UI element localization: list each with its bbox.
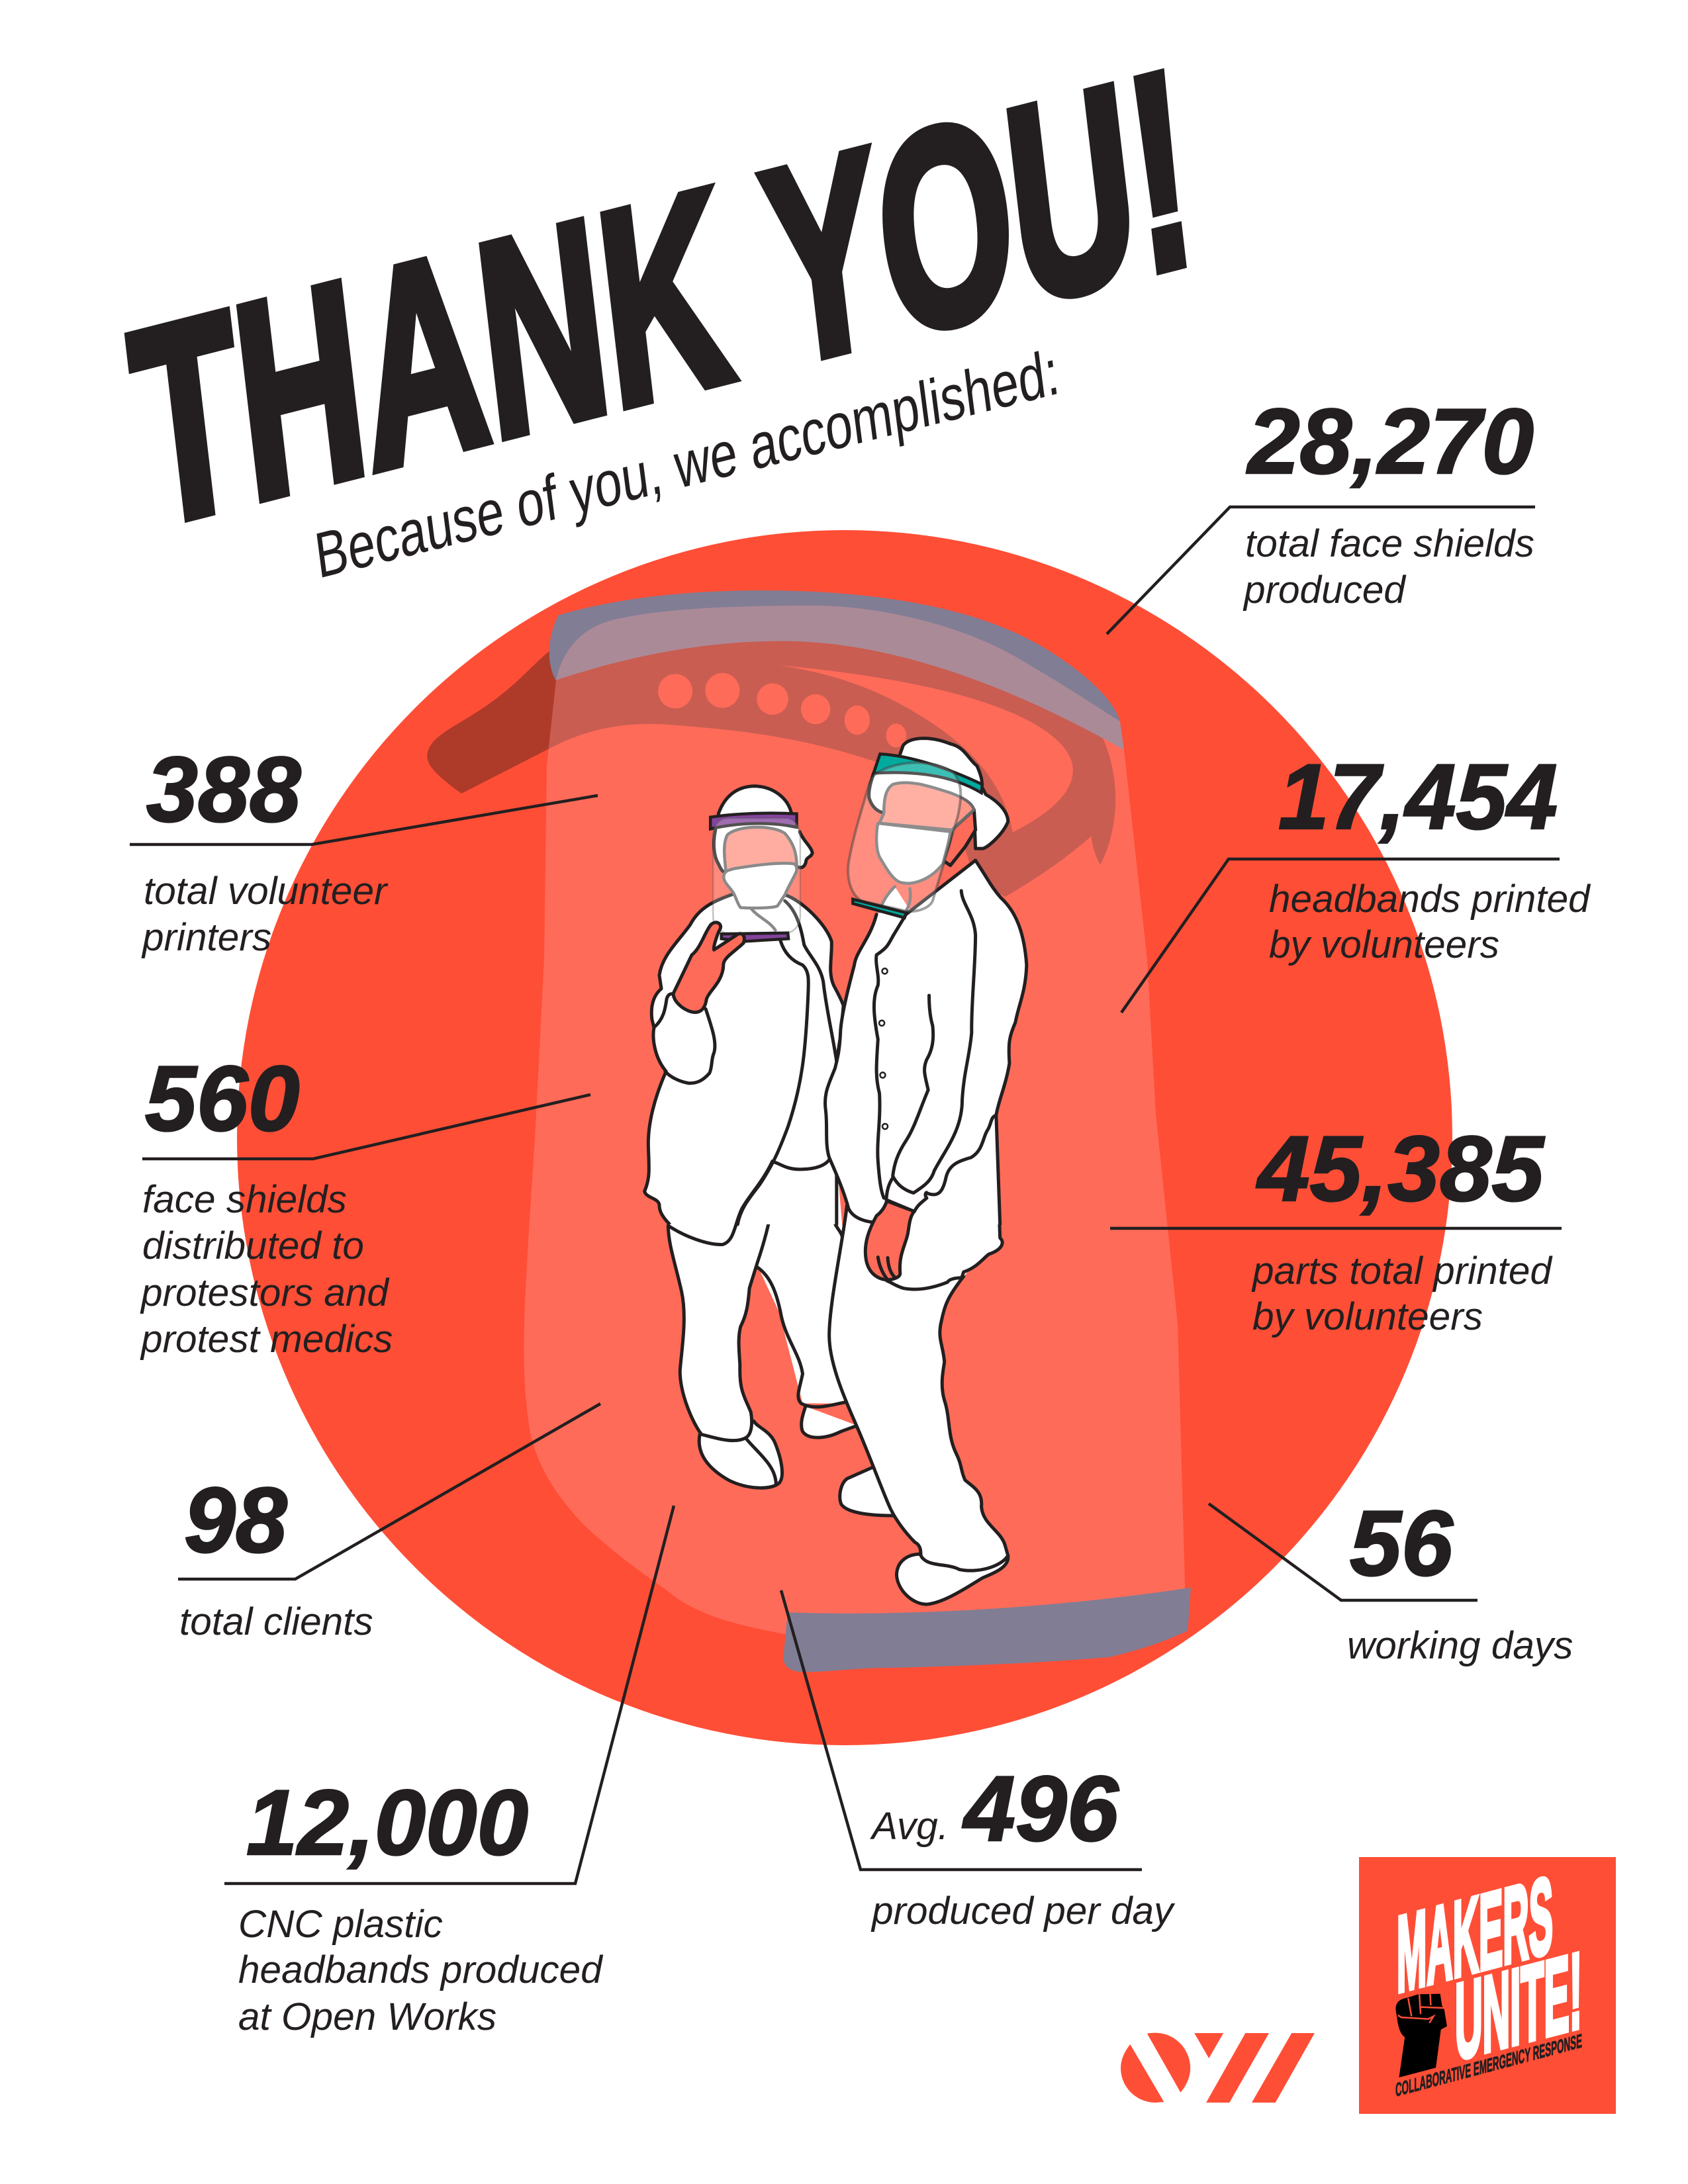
lower teal band [853,899,906,918]
stat: 45,385 parts total printed [1110,1116,1562,1338]
buttons [879,968,888,1129]
hat [869,739,1008,848]
stat: 12,000 CNC plastic headbands [224,1506,674,2038]
stat: Avg. 496 produced per day: Avg. [870,1805,949,1848]
ear strap [943,809,976,866]
logo fist icon [1395,1993,1447,2077]
stat: Avg. 496 produced per day: 496 [962,1756,1119,1860]
logo square [1359,1857,1616,2114]
stat: 45,385 parts total printed: parts total printed [1251,1250,1553,1293]
lower purple band [722,933,788,941]
stat: 56 working days: 56 [1350,1491,1454,1595]
stat: 388 total volunteer printers: 388 [146,737,301,841]
stat: Avg. 496 produced per day: produced per day [870,1889,1176,1933]
headband purple [710,813,797,829]
stat: 12,000 CNC plastic headbands: CNC plastic [238,1903,443,1946]
stat: 98 total clients [178,1404,600,1643]
stat: 45,385 parts total printed: by volunteers [1252,1295,1483,1338]
stat: 12,000 CNC plastic headbands: at Open Works [238,1995,496,2038]
shield holes [658,673,906,747]
stat: 17,454 headbands printed: 17,454 [1278,745,1558,848]
hand peace sign [673,923,744,1013]
person right: legs and feet [829,1158,1008,1604]
shield panel [713,818,800,933]
person right: hand [865,1201,914,1280]
stat: 12,000 CNC plastic headbands: 12,000 [246,1770,528,1874]
headband teal [874,754,982,793]
stat: 12,000 CNC plastic headbands: headbands produced [238,1948,604,1991]
illustration: face shield backdrop [427,590,1191,1672]
shield panel [848,762,961,911]
stat: 17,454 headbands printed [1121,745,1591,1013]
translucent shield body [524,606,1186,1635]
person right: torso and head [825,739,1027,1224]
stat: 560 face shields distributed: protest medics [140,1318,393,1361]
illustration: two people in protective suits [645,739,1027,1604]
person left: jacket hem [668,1161,773,1244]
stat: 28,270 total face shields [1107,389,1535,634]
logo: Open Works [1121,2033,1315,2103]
stat: 98 total clients: 98 [184,1468,287,1572]
stat: 28,270 total face shields: total face shields [1245,522,1534,565]
stat: 560 face shields distributed: face shields [142,1178,347,1221]
face [724,827,797,872]
stat: 17,454 headbands printed: by volunteers [1269,923,1499,966]
shield bottom grey band [783,1588,1191,1672]
stat: 45,385 parts total printed: 45,385 [1256,1116,1545,1220]
subtitle: Because of you, we accomplished: [311,335,1063,592]
stat: 98 total clients: total clients [179,1600,373,1643]
stat: 388 total volunteer printers: printers [141,916,271,959]
stat: 560 face shields distributed: distributed to [142,1224,364,1267]
mask [876,823,951,884]
stat: 28,270 total face shields: produced [1243,569,1407,612]
red circle [237,530,1452,1745]
shield band shadow swoosh [427,590,1124,897]
person left: torso and head [645,786,843,1224]
stat: 56 working days: working days [1347,1624,1573,1667]
stat: 56 working days [1209,1491,1573,1667]
stat: 560 face shields distributed: protestors and [140,1271,390,1314]
person left: legs and feet [668,1158,857,1488]
face [880,783,974,830]
mask [724,863,797,908]
stat: 388 total volunteer printers [130,737,598,959]
stat: 560 face shields distributed [140,1046,590,1361]
logo: Makers Unite [1359,1854,1616,2114]
stat: Avg. 496 produced per day [781,1590,1176,1933]
stat: 560 face shields distributed: 560 [145,1046,300,1150]
stat: 388 total volunteer printers: total volunteer [144,870,389,913]
stat: 17,454 headbands printed: headbands printed [1269,878,1591,921]
stat: 28,270 total face shields: 28,270 [1246,389,1534,493]
